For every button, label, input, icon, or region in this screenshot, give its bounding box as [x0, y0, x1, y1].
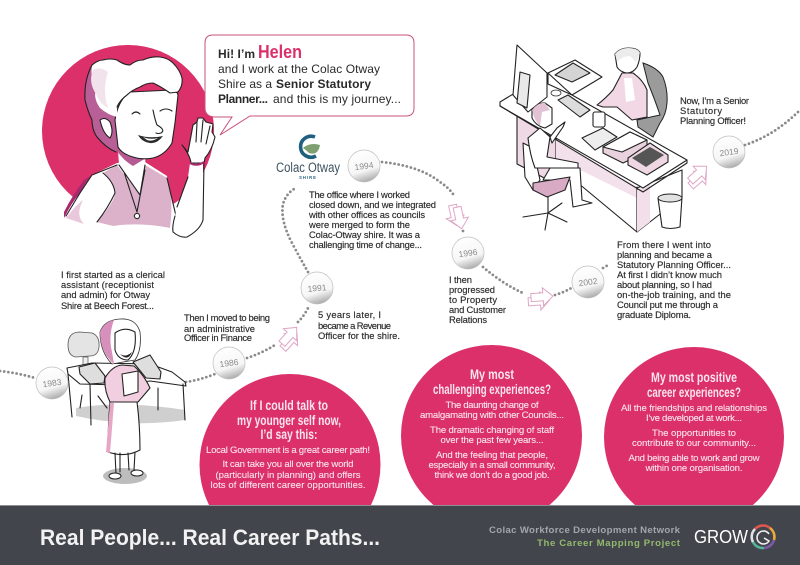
Helen head [615, 48, 640, 73]
panel: challenging experiences: amalgamating with other Councils... [420, 410, 564, 421]
text: 1996 progression: Relations [449, 314, 487, 325]
visitor arm [550, 122, 565, 143]
speech bubble: Senior Statutory [276, 77, 371, 91]
year marker: 1994 [348, 150, 380, 182]
visitor trousers [543, 168, 592, 207]
panel: younger self advice: It can take you all over the world [222, 459, 354, 470]
face [115, 90, 178, 159]
text: 1994 merger [308, 189, 436, 250]
panel: challenging experiences: challenging experiences? [433, 381, 551, 397]
hand [182, 118, 215, 163]
left sleeve [65, 172, 115, 223]
speech bubble: and this is my journey... [273, 92, 401, 106]
panel: challenging experiences: The dramatic changing of staff [430, 425, 554, 436]
speech bubble: Shire as a [218, 77, 272, 91]
illustration: young Helen at reception desk [67, 319, 186, 484]
footer band [0, 505, 800, 565]
year marker: 1991 [301, 272, 333, 304]
text: 2002 planning [617, 239, 731, 320]
hair back shading [85, 66, 125, 152]
front panel [578, 157, 637, 232]
text: 1996 progression [449, 274, 506, 325]
text: 2002 planning: Statutory Planning Officer... [617, 259, 731, 270]
panel: younger self advice: my younger self now, [237, 412, 341, 428]
text: 2002 planning: graduate Diploma. [617, 309, 691, 320]
text: 2002 planning: about planning, so I had [617, 279, 712, 290]
text: first job 1983: Shire at Beech Forest... [61, 300, 154, 311]
text: 1996 progression: progressed [449, 284, 495, 295]
folders [603, 132, 647, 163]
year marker: 1986 [213, 347, 245, 379]
chair of Helen [637, 63, 667, 137]
logo: Colac Otway Shire [276, 136, 340, 180]
text: 1986 move: Then I moved to being [184, 312, 270, 323]
keyboard [558, 95, 590, 117]
year marker: 1983: 1983 [42, 377, 62, 389]
speech bubble: Planner... [218, 92, 268, 106]
desk top [500, 73, 687, 188]
panel: younger self advice: I’d say this: [260, 426, 318, 442]
book piles [79, 363, 105, 384]
year marker: 1991: 1991 [307, 282, 327, 294]
smile [138, 135, 163, 143]
year marker: 1996 [452, 237, 484, 269]
text: 1994 merger: with other offices as councils [308, 209, 425, 220]
year marker: 2019: 2019 [719, 146, 739, 158]
logo: Colac Otway Shire: Colac Otway [276, 160, 340, 175]
text: 1986 move [184, 312, 270, 343]
icon: GROW ring [752, 526, 774, 548]
text: 1991 revenue officer: became a Revenue [318, 320, 391, 331]
panel: challenging experiences: especially in a small community, [428, 460, 556, 471]
text: 2002 planning: Council put me through a [617, 299, 719, 310]
panel: positive experiences: career experiences? [647, 384, 741, 400]
person hair [100, 319, 140, 364]
name: Helen: Helen [258, 42, 302, 62]
held books [122, 371, 138, 396]
panel: challenging experiences [401, 345, 582, 526]
text: 1991 revenue officer: Officer for the shire. [318, 330, 400, 341]
panel: younger self advice [200, 374, 380, 555]
text: 1996 progression: I then [449, 274, 472, 285]
speech bubble [205, 35, 414, 135]
text: 1994 merger: were merged to form the [308, 219, 410, 230]
end panel [637, 170, 682, 232]
panel: positive experiences: contribute to our community... [632, 438, 756, 449]
year marker: 1996: 1996 [458, 247, 478, 259]
mug [593, 112, 605, 127]
text: 2002 planning: on-the-job training, and the [617, 289, 731, 300]
text: 1991 revenue officer: 5 years later, I [318, 309, 381, 320]
career timeline dotted path [0, 110, 800, 382]
visitor head [532, 103, 552, 128]
chair [68, 332, 99, 357]
logo: Colac Otway Shire: SHIRE [299, 175, 317, 180]
text: first job 1983: and admin) for Otway [61, 289, 150, 300]
seated Helen body [597, 73, 647, 120]
paper [582, 128, 617, 150]
GROW wordmark: GROW [694, 527, 748, 547]
white body halo [62, 162, 176, 236]
panel: challenging experiences: over the past few years... [440, 435, 544, 446]
network name: Colac Workforce Development Network [489, 525, 681, 536]
challenging heading: My most [470, 366, 514, 382]
year marker: 1983 [36, 367, 68, 399]
desk [67, 363, 186, 386]
advice body: Local Government is a great career path! [206, 445, 370, 456]
year marker: 1994: 1994 [354, 160, 374, 172]
text: 2019 current role: Now, I’m a Senior [680, 95, 749, 106]
text: 2002 planning: planning and became a [617, 249, 713, 260]
eyes [132, 109, 172, 114]
advice heading: If I could talk to [250, 397, 328, 413]
panel: challenging experiences: And the feeling that people, [436, 450, 548, 461]
monitor [513, 45, 547, 112]
project name: The Career Mapping Project [537, 538, 681, 549]
panel: positive experiences: The opportunities to [652, 428, 736, 439]
text: 1991 revenue officer [318, 309, 400, 341]
top [105, 365, 150, 402]
panel: positive experiences: within one organisation. [644, 463, 742, 474]
text: 1994 merger: The office where I worked [309, 189, 410, 200]
arrow: 1994 to 1996 [444, 202, 471, 231]
bubble greeting: Hi! I’m [218, 47, 255, 61]
text: 1996 progression: to Property [449, 294, 497, 305]
illustration: two people at planning desk [500, 45, 687, 232]
panel: younger self advice: lots of different career opportunities. [210, 480, 366, 491]
panel: positive experiences: And being able to work and grow [628, 453, 760, 464]
text: first job 1983: assistant (receptionist [61, 279, 154, 290]
positive body: All the friendships and relationships [621, 403, 767, 414]
panel: positive experiences [604, 347, 784, 527]
text: 2019 current role [680, 95, 749, 126]
arrow: 1996 to 2002 [527, 287, 554, 311]
arm [173, 163, 203, 237]
bubble text: and I work at the Colac Otway [218, 62, 380, 76]
text: first job 1983: I first started as a clerical [61, 269, 165, 280]
floor shadow [76, 404, 185, 423]
text: 2019 current role: Statutory [680, 105, 722, 116]
text: 1996 progression: and Customer [449, 304, 506, 315]
in tray [628, 143, 668, 175]
panel: positive experiences: I’ve developed at work... [646, 413, 742, 424]
visitor chair [523, 143, 540, 190]
skirt [108, 402, 140, 455]
year marker: 1986: 1986 [219, 357, 239, 369]
footer title: Real People... Real Career Paths... [40, 525, 380, 550]
panel: younger self advice: (particularly in planning) and offers [216, 470, 361, 481]
illustration: Helen waving [62, 57, 215, 237]
visitor body [528, 128, 578, 168]
phone [555, 63, 590, 82]
text: 2002 planning: At first I didn’t know much [617, 269, 722, 280]
pink portrait circle [42, 45, 214, 217]
text: 2019 current role: Planning Officer! [680, 115, 746, 126]
hair [92, 57, 182, 117]
face [115, 329, 135, 360]
arrow: 2002 to 2019 [682, 160, 715, 193]
pink top [97, 165, 171, 228]
nose [153, 110, 163, 134]
text: 1986 move: Officer in Finance [184, 332, 252, 343]
mouse [551, 90, 561, 96]
neck and necklace [118, 150, 146, 195]
year marker: 2002 [572, 266, 604, 298]
year marker: 2002: 2002 [578, 276, 598, 288]
ear [100, 118, 112, 138]
text: first job 1983 [61, 269, 165, 311]
text: 2002 planning: From there I went into [617, 239, 711, 250]
arrow: 1986 to 1991 [273, 321, 306, 355]
text: 1994 merger: Colac-Otway shire. It was a [309, 229, 421, 240]
challenging body: The daunting change of [446, 400, 539, 411]
panel: challenging experiences: think we don’t do a good job. [434, 470, 550, 481]
positive heading: My most positive [651, 369, 737, 385]
legs and shadow [103, 468, 147, 484]
bin [658, 197, 682, 228]
left desk panel [517, 112, 556, 184]
text: 1986 move: an administrative [184, 323, 255, 334]
text: 1994 merger: closed down, and we integrated [309, 199, 436, 210]
text: 1994 merger: challenging time of change... [309, 239, 422, 250]
wrist band [190, 162, 204, 165]
year marker: 2019 [713, 136, 745, 168]
